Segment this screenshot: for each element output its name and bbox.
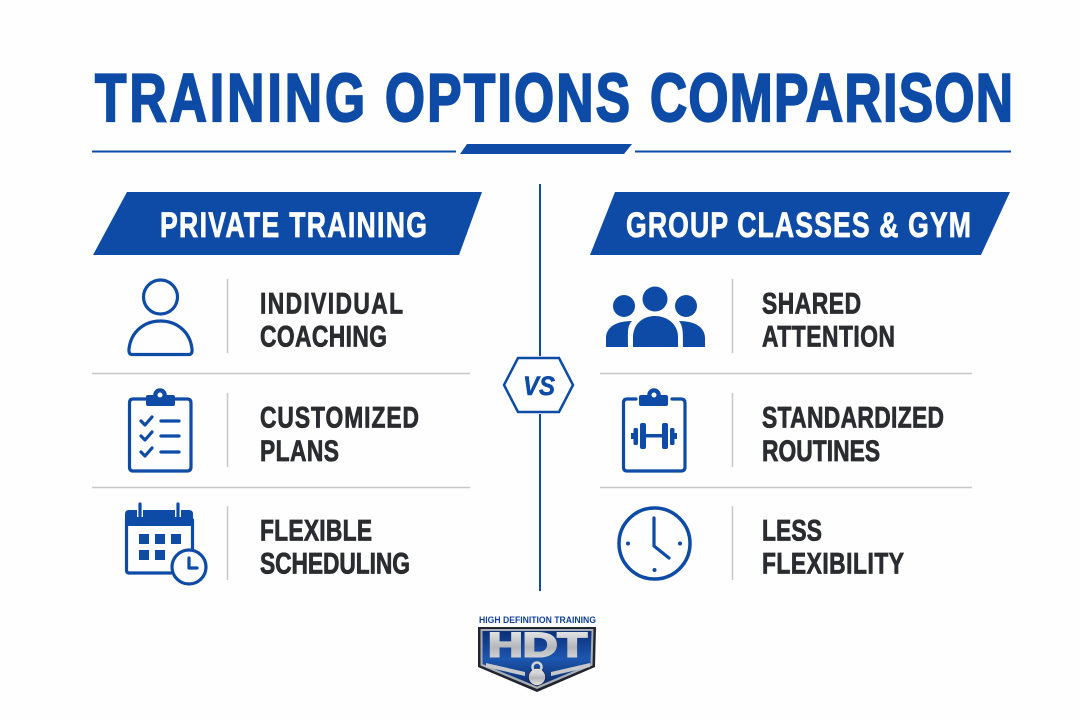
text: flexible scheduling: FLEXIBLE <box>260 513 372 547</box>
heading banner: group classes and gym <box>590 192 1010 255</box>
logo: HDT High Definition Training <box>478 615 596 692</box>
text: customized plans: CUSTOMIZED <box>260 400 419 434</box>
icon: group of people <box>606 286 705 347</box>
text: flexible scheduling <box>260 513 410 580</box>
logo: HDT High Definition Training: HDT <box>488 626 587 664</box>
icon: calendar with clock <box>125 504 206 584</box>
text: standardized routines: ROUTINES <box>762 434 880 468</box>
text: standardized routines: STANDARDIZED <box>762 400 944 434</box>
text: customized plans: PLANS <box>260 434 339 468</box>
heading banner: private training <box>93 192 482 255</box>
heading banner: private training: PRIVATE TRAINING <box>160 205 427 245</box>
text: shared attention: SHARED <box>762 286 861 320</box>
text: shared attention <box>762 286 895 353</box>
text: flexible scheduling: SCHEDULING <box>260 546 410 580</box>
VS hexagon badge <box>504 358 573 412</box>
title <box>95 60 1013 136</box>
icon: clipboard with dumbbell <box>624 388 685 471</box>
title: TRAINING <box>95 60 365 136</box>
icon: person <box>129 280 192 354</box>
title: OPTIONS <box>385 60 630 136</box>
text: individual coaching: INDIVIDUAL <box>260 286 403 320</box>
text: individual coaching <box>260 286 403 353</box>
text: individual coaching: COACHING <box>260 319 387 353</box>
text: less flexibility: FLEXIBILITY <box>762 546 904 580</box>
title: COMPARISON <box>650 60 1013 136</box>
panel: private training <box>92 192 482 584</box>
panel: group classes and gym <box>590 192 1010 580</box>
text: standardized routines <box>762 400 944 468</box>
icon: clock <box>619 508 690 579</box>
heading banner: group classes and gym: GROUP CLASSES & GYM <box>626 205 971 245</box>
text: customized plans <box>260 400 419 468</box>
center divider with VS badge <box>504 184 573 591</box>
icon: checklist clipboard <box>130 388 191 471</box>
logo: HDT High Definition Training: HIGH DEFINITION TRAINING <box>479 615 596 626</box>
VS hexagon badge: VS <box>523 371 555 401</box>
text: less flexibility <box>762 513 904 580</box>
title underline <box>92 144 1011 154</box>
text: shared attention: ATTENTION <box>762 319 895 353</box>
text: less flexibility: LESS <box>762 513 822 547</box>
